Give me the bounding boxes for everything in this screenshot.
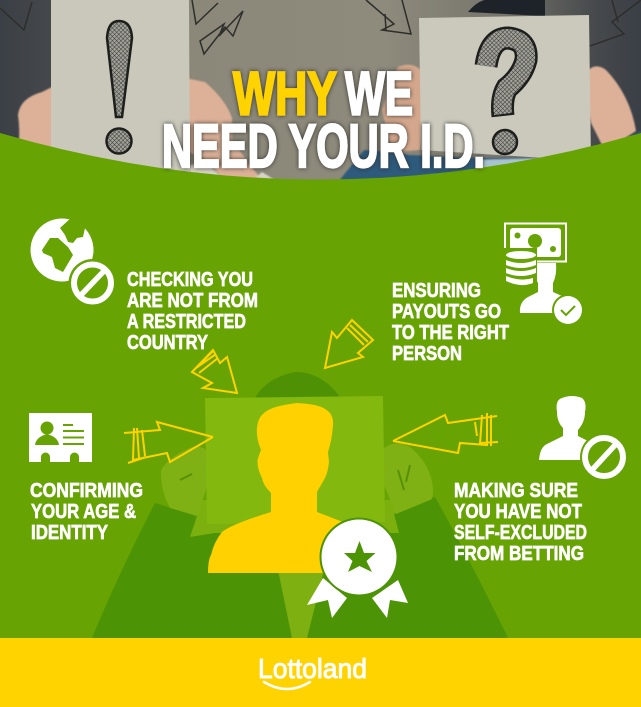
arrow: right [393,413,498,453]
icon: banknote, coins and verified person [503,224,584,326]
paper: exclamation mark [51,0,190,180]
text: age and identity: YOUR AGE & [31,501,136,523]
panel: green background [0,133,641,640]
left hand [161,446,212,516]
arrow: top left [192,350,237,393]
shirt [278,570,324,638]
head [468,0,545,16]
icon: medal [307,518,408,618]
icon: globe with prohibition sign [30,214,116,307]
text: age and identity: IDENTITY [31,522,109,544]
photo: hands, sleeves and jacket [13,65,641,190]
text: payouts: TO THE RIGHT [392,322,509,344]
panel: header photo [0,0,641,190]
photo: right person's jacket [338,150,590,182]
title [162,60,485,180]
jacket [92,497,508,638]
paper [205,396,385,524]
text: self-exclusion: FROM BETTING [454,543,584,565]
title: WE [345,60,413,128]
text: self-exclusion: SELF-EXCLUDED [454,522,587,544]
text: restricted country: ARE NOT FROM [127,290,258,312]
text: restricted country [127,269,258,354]
text: payouts [392,280,509,365]
icon: ID card [29,413,92,462]
ribbons [307,578,347,618]
text: age and identity [30,480,143,544]
text: payouts: PAYOUTS GO [392,301,501,323]
text: restricted country: COUNTRY [127,332,209,354]
arrow: left [124,422,213,463]
title line 2: NEED YOUR I.D. [162,112,485,180]
title line 1: WHY [233,60,337,128]
logo: Lottoland: Lottoland [258,653,367,684]
text: age and identity: CONFIRMING [30,480,143,502]
text: self-exclusion: YOU HAVE NOT [454,501,582,523]
paper: question mark [419,15,591,161]
star [344,541,376,572]
footer band [0,638,641,707]
hair [255,372,340,398]
logo smile [264,682,310,689]
photo: overlaid person silhouette [92,372,508,638]
icon: person with prohibition sign [539,396,628,481]
right hand [380,443,433,514]
arrow: top right [325,320,373,368]
text: payouts: PERSON [392,343,462,365]
text: payouts: ENSURING [392,280,481,302]
icon: yellow person silhouette [208,403,352,573]
finger creases [180,465,410,490]
text: self-exclusion: MAKING SURE [454,480,578,502]
text: restricted country: CHECKING YOU [127,269,253,291]
sketched wall arrows [0,0,641,54]
text: self-exclusion [454,480,587,565]
text: restricted country: A RESTRICTED [127,311,246,333]
lime backdrop below paper [190,500,403,548]
